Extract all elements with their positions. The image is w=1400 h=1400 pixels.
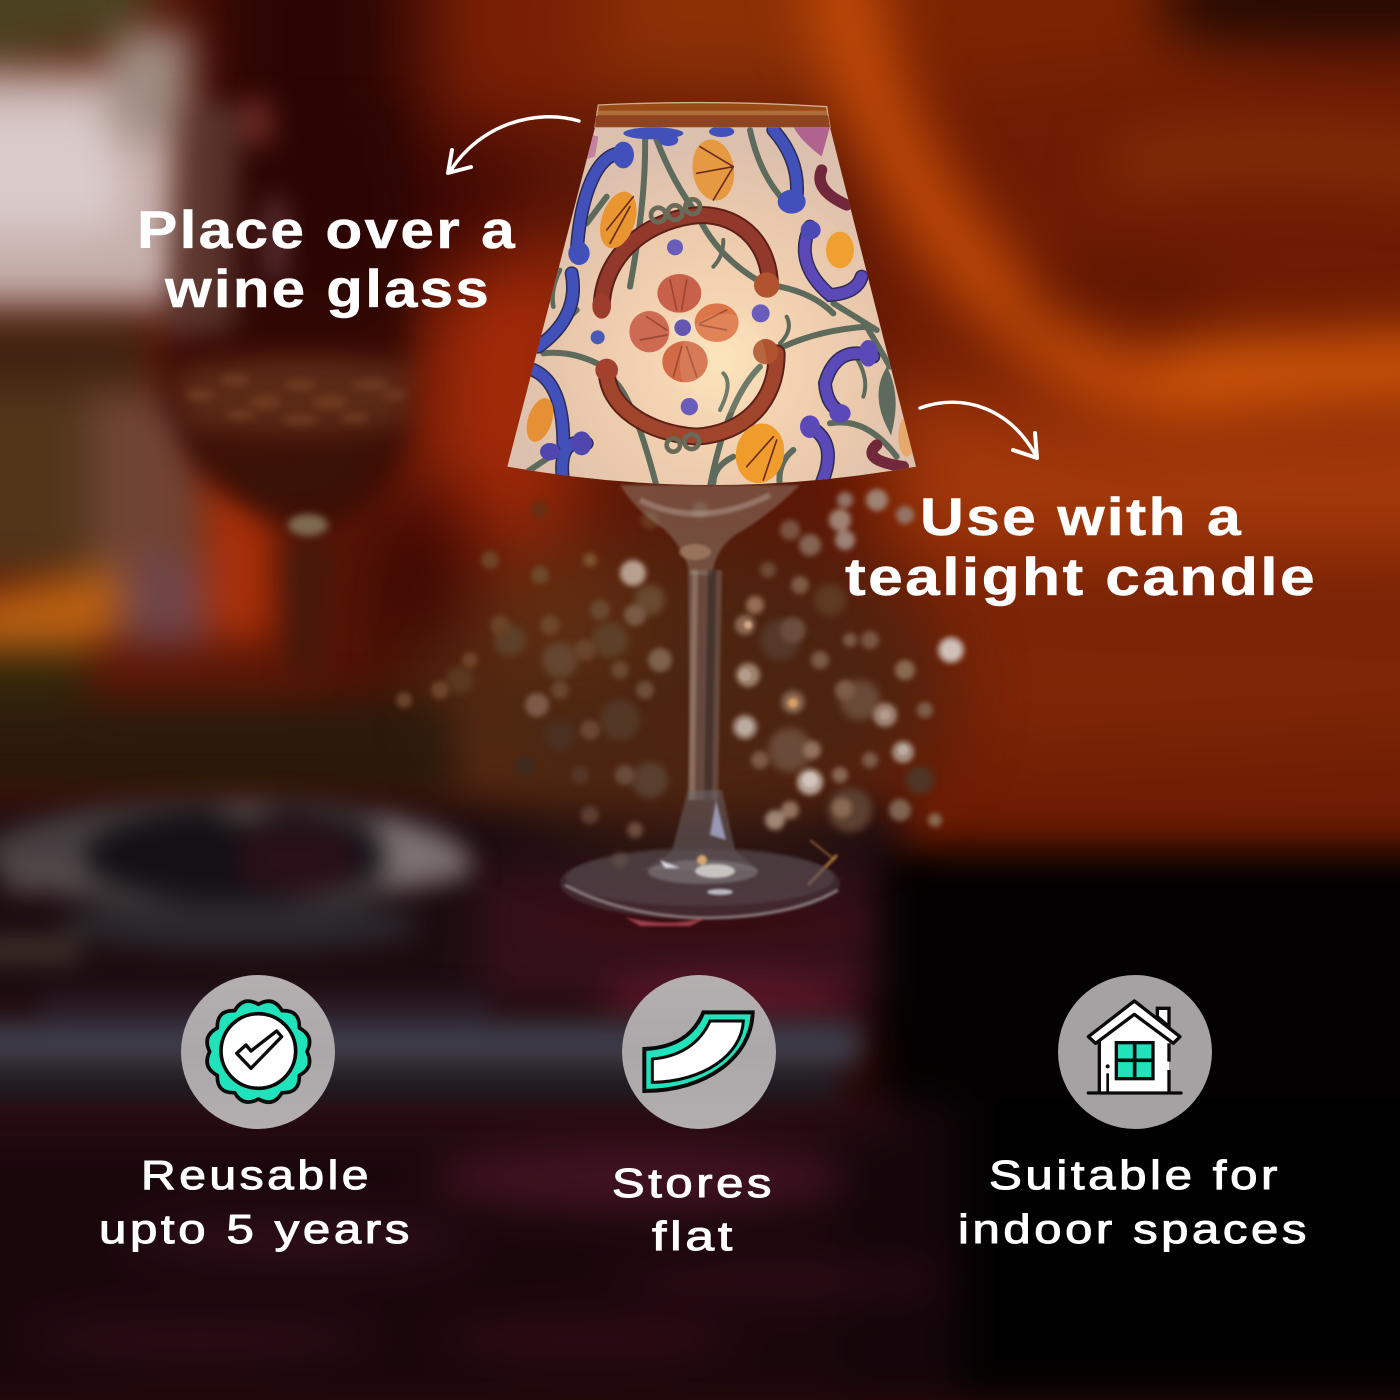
lamp shade <box>507 103 916 487</box>
icon: flat shade <box>644 1012 753 1091</box>
label: reusable upto 5 years: Reusable <box>141 1152 372 1198</box>
arrow: to candle <box>920 402 1037 458</box>
label: suitable for indoor spaces <box>958 1152 1310 1252</box>
plum scrolls <box>820 170 903 467</box>
label: stores flat: Stores <box>612 1160 775 1206</box>
heading: use with a tealight candle <box>845 488 1317 607</box>
panel: stores flat <box>612 975 776 1259</box>
ring knots <box>651 199 700 452</box>
central light glow <box>680 313 767 413</box>
arrow: to wine glass rim <box>448 117 579 173</box>
wine glass stem and base <box>560 485 840 926</box>
panel: indoor spaces <box>958 975 1310 1252</box>
table, plate and book <box>0 800 1400 1400</box>
badge background circle <box>181 975 335 1129</box>
house icon background circle <box>1058 975 1212 1129</box>
heading: place over a wine glass: Place over a <box>137 201 517 260</box>
icon: check badge <box>207 1001 310 1102</box>
red rings <box>602 215 770 307</box>
orange flowers <box>522 137 915 487</box>
icon: house <box>1088 1001 1181 1093</box>
shade glass rim <box>595 103 830 127</box>
blue scrolls <box>533 130 873 487</box>
heading: use with a tealight candle: Use with a <box>920 488 1243 547</box>
label: reusable upto 5 years <box>99 1152 413 1252</box>
baby's breath flowers <box>396 489 964 885</box>
label: suitable for indoor spaces: indoor spaces <box>958 1206 1310 1252</box>
shade body <box>507 127 916 485</box>
heading: use with a tealight candle: tealight candle <box>845 548 1317 607</box>
stems <box>520 130 897 487</box>
panel: reusable <box>99 975 413 1252</box>
heading: place over a wine glass: wine glass <box>164 260 491 319</box>
flower petals <box>591 239 770 415</box>
label: stores flat: flat <box>652 1213 736 1259</box>
label: suitable for indoor spaces: Suitable for <box>989 1152 1281 1198</box>
blurred wine glass in background <box>160 100 410 680</box>
flat icon background circle <box>622 975 776 1129</box>
label: stores flat <box>612 1160 775 1259</box>
heading: place over a wine glass <box>137 201 517 319</box>
label: reusable upto 5 years: upto 5 years <box>99 1206 413 1252</box>
